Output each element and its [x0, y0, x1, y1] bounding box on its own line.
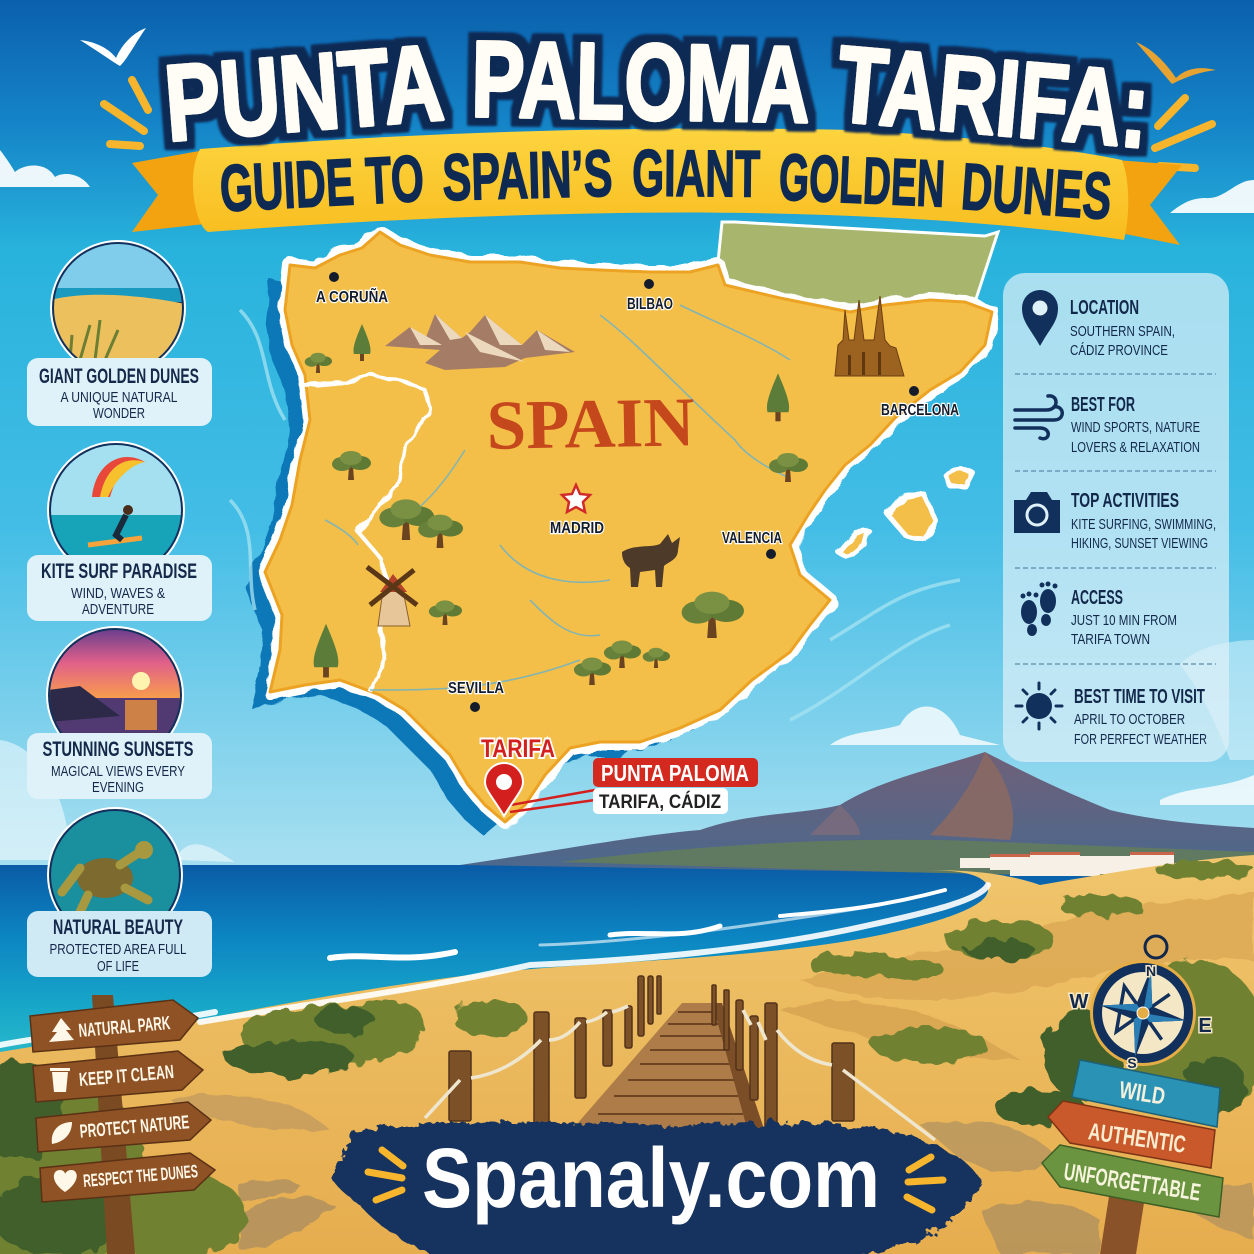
- sign: natural park: [30, 1000, 198, 1052]
- panel: natural beauty: OF LIFE: [97, 959, 139, 975]
- white coastal town: [960, 852, 1174, 876]
- fact: best time to visit: FOR PERFECT WEATHER: [1074, 731, 1207, 748]
- fact: location: SOUTHERN SPAIN,: [1070, 323, 1175, 340]
- clouds: [0, 150, 1254, 862]
- panel: kite surf paradise: ADVENTURE: [82, 602, 154, 618]
- sign: wild: [1072, 1060, 1220, 1127]
- website banner: [330, 1122, 982, 1254]
- city labels: VALENCIA: [722, 530, 782, 547]
- city markers: [329, 272, 919, 712]
- compass: S: [1127, 1055, 1137, 1071]
- title: TARIFA:: [833, 23, 1154, 171]
- right signpost: [1042, 1060, 1223, 1254]
- fact: access: JUST 10 MIN FROM: [1071, 612, 1177, 629]
- sea current swirls: [230, 310, 960, 720]
- left signpost: [30, 995, 215, 1254]
- decorative rays: [368, 1150, 943, 1210]
- fact: best for: [1015, 394, 1200, 456]
- fact: access: TARIFA TOWN: [1071, 631, 1150, 648]
- title: [161, 18, 1154, 171]
- Spain and Portugal map: [265, 232, 992, 822]
- fact: access: ACCESS: [1071, 587, 1123, 609]
- subtitle: DUNES: [959, 149, 1114, 233]
- Sagrada Familia icon: [835, 296, 904, 376]
- icon: dunes photo: [50, 240, 186, 358]
- panel: stunning sunsets: EVENING: [92, 780, 144, 796]
- beach and dunes: [0, 855, 1254, 1254]
- callout: Punta Paloma: [593, 758, 758, 814]
- city labels: SEVILLA: [448, 680, 504, 697]
- panel: natural beauty: NATURAL BEAUTY: [53, 916, 183, 939]
- subtitle: [218, 135, 1114, 233]
- city labels: [316, 286, 959, 697]
- fact: location: [1022, 290, 1175, 359]
- sea: [0, 865, 1254, 1065]
- sun rays beside title: [104, 80, 1212, 168]
- fact: best for: WIND SPORTS, NATURE: [1071, 419, 1200, 436]
- panel: natural beauty: PROTECTED AREA FULL: [50, 942, 186, 958]
- Tarifa label: TARIFA: [481, 735, 555, 763]
- bird: golden gull: [1136, 42, 1216, 84]
- mountains: [460, 752, 1254, 880]
- panel: stunning sunsets: MAGICAL VIEWS EVERY: [51, 764, 185, 780]
- panel: kite surf paradise: KITE SURF PARADISE: [41, 560, 197, 583]
- panel: stunning sunsets: STUNNING SUNSETS: [42, 738, 194, 761]
- bull: [622, 534, 680, 587]
- ribbon banner: [132, 128, 1182, 245]
- panel: giant golden dunes: GIANT GOLDEN DUNES: [39, 365, 199, 388]
- France region: [718, 222, 998, 312]
- subtitle: GIANT: [632, 135, 761, 211]
- Spain label: SPAIN: [486, 384, 695, 465]
- dividers: [1015, 374, 1216, 664]
- panel: quick facts: [1003, 273, 1229, 762]
- shrubs: [0, 860, 1254, 1254]
- subtitle: GUIDE TO: [218, 141, 426, 225]
- surf waves: [0, 885, 988, 1045]
- website name: Spanaly.com: [422, 1131, 880, 1225]
- fact: top activities: [1014, 490, 1216, 552]
- panel: kite surf paradise: [27, 440, 212, 621]
- trees on map: [305, 324, 808, 685]
- windmill: [367, 567, 417, 626]
- panel: kite surf paradise: WIND, WAVES &: [71, 586, 165, 602]
- fact: best time to visit: APRIL TO OCTOBER: [1074, 711, 1185, 728]
- map pin: Tarifa: [485, 763, 523, 816]
- sign: protect nature: PROTECT NATURE: [79, 1112, 190, 1143]
- panel: natural beauty: [27, 805, 212, 977]
- callout: Punta Paloma: PUNTA PALOMA: [601, 760, 749, 786]
- icon: kite surfer photo: [47, 441, 185, 555]
- compass: N: [1146, 963, 1156, 979]
- callout connector: [505, 790, 595, 812]
- sign: respect the dunes: [40, 1153, 215, 1202]
- sign: keep it clean: KEEP IT CLEAN: [78, 1062, 175, 1091]
- icon: turtle photo: [45, 805, 185, 945]
- subtitle: GOLDEN: [777, 139, 947, 221]
- rivers: [325, 305, 790, 690]
- fact: best for: LOVERS & RELAXATION: [1071, 439, 1200, 456]
- fact: location: LOCATION: [1070, 297, 1139, 319]
- city labels: A CORUÑA: [316, 286, 388, 306]
- map sea shadow: [245, 247, 972, 837]
- fact: top activities: TOP ACTIVITIES: [1071, 490, 1179, 512]
- dune shadows: [170, 890, 1254, 1254]
- Portugal border: [305, 375, 432, 692]
- panel: stunning sunsets: [27, 625, 212, 799]
- sign: wild: WILD: [1117, 1077, 1167, 1111]
- bird: white gull: [80, 28, 146, 66]
- sign: protect nature: [36, 1102, 211, 1152]
- icon: sunset photo: [46, 626, 184, 733]
- callout: Punta Paloma: TARIFA, CÁDIZ: [599, 791, 721, 813]
- mountains on map: [385, 314, 575, 370]
- city labels: MADRID: [550, 520, 604, 537]
- fact: location: CÁDIZ PROVINCE: [1070, 342, 1168, 359]
- compass: W: [1070, 991, 1089, 1013]
- compass: [1070, 936, 1212, 1071]
- city labels: BILBAO: [627, 296, 673, 313]
- panel: giant golden dunes: A UNIQUE NATURAL: [60, 390, 178, 406]
- sign: natural park: NATURAL PARK: [78, 1013, 171, 1042]
- city labels: BARCELONA: [881, 402, 959, 419]
- fact: best time to visit: [1016, 683, 1207, 748]
- boardwalk: [449, 976, 854, 1132]
- compass: E: [1198, 1015, 1212, 1037]
- title: PUNTA: [161, 21, 447, 164]
- Balearic islands: [838, 468, 972, 558]
- fact: access: [1020, 582, 1177, 648]
- panel: giant golden dunes: WONDER: [93, 406, 145, 422]
- sign: authentic: AUTHENTIC: [1087, 1118, 1187, 1159]
- sign: keep it clean: [33, 1051, 203, 1102]
- fence posts: [449, 976, 854, 1129]
- sign: unforgettable: [1042, 1145, 1223, 1217]
- sign: respect the dunes: RESPECT THE DUNES: [82, 1161, 199, 1191]
- panel: giant golden dunes: [27, 240, 212, 426]
- Madrid star: [562, 485, 590, 512]
- title: PALOMA: [471, 18, 811, 145]
- sign: authentic: [1048, 1101, 1215, 1168]
- rope railings: [425, 1006, 935, 1140]
- fact: best for: BEST FOR: [1071, 394, 1135, 416]
- subtitle: SPAIN’S: [441, 136, 613, 214]
